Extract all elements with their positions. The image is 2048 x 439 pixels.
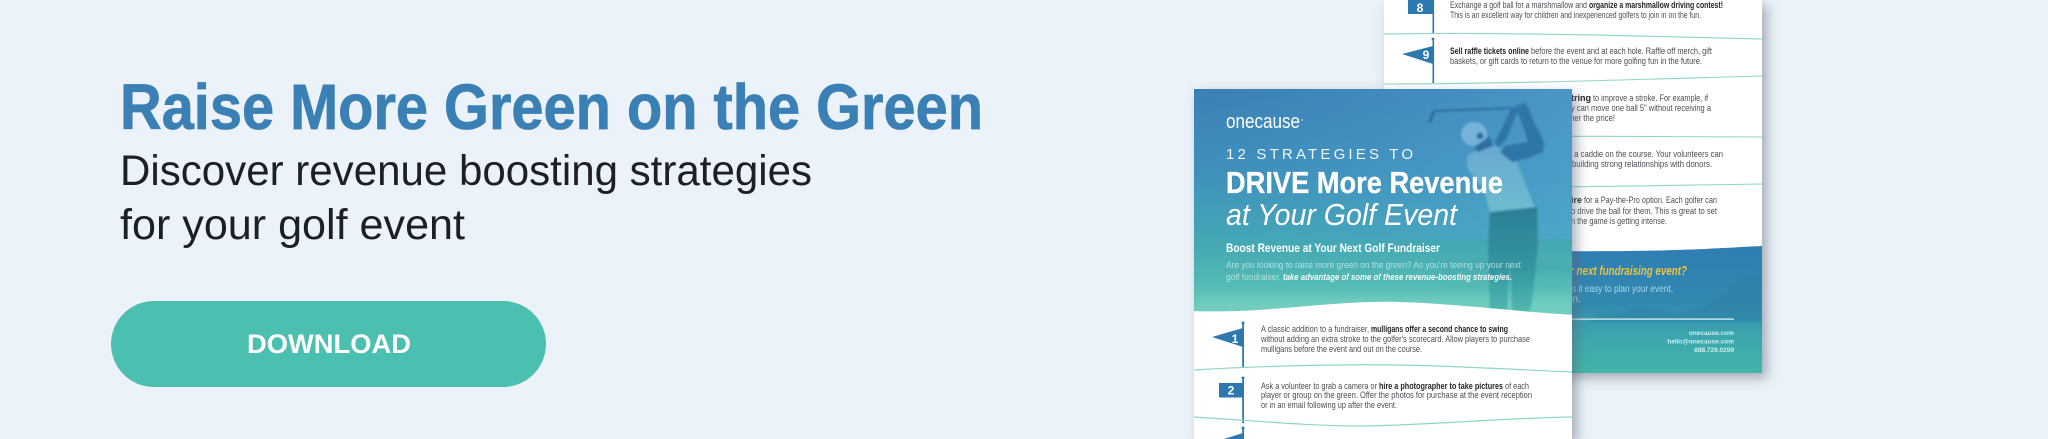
strategy 10 text: string [1566,93,1591,103]
download button: DOWNLOAD [247,329,411,359]
icon: flag 3 [1224,426,1244,439]
strategy 1: A classic addition to a fundraiser, [1261,324,1369,334]
strategy 2: player or group on the green. Offer the photos for purchase at the event reception [1261,390,1532,400]
flyer intro [1226,243,1521,283]
strategy 1: mulligans before the event and out on the course. [1261,344,1422,354]
strategy 12 text: n the game is getting intense. [1571,216,1667,226]
footer body [1572,284,1673,305]
flyer heading: 12 STRATEGIES TO [1226,146,1413,163]
strategy 8: organize a marshmallow driving contest! [1589,0,1723,10]
front page of flyer [1190,89,1576,439]
strategy 1: 1 [1232,332,1239,346]
footer contact: hello@onecause.com [1667,338,1734,346]
strategy 8 [1408,0,1723,33]
subtitle [120,147,812,249]
title: Raise More Green on the Green [120,71,983,143]
strategy 1: mulligans offer a second chance to swing [1371,324,1508,334]
footer contact: onecause.com [1689,330,1734,337]
strategy 2: Ask a volunteer to grab a camera or [1261,381,1377,391]
strategy 9: before the event and at each hole. Raffle off merch, gift [1531,46,1712,56]
logo: onecause [1226,111,1300,133]
strategy 2 [1219,376,1532,423]
footer contact: 888.729.0299 [1694,347,1734,354]
strategy 2: of each [1505,381,1529,391]
back page of flyer [1190,0,1762,439]
horizon haze [1198,298,1568,306]
strategy 1: without adding an extra stroke to the golfer's scorecard. Allow players to purchase [1260,334,1530,344]
white page body wave [1194,302,1572,319]
subtitle: Discover revenue boosting strategies [120,147,812,195]
flyer intro: Boost Revenue at Your Next Golf Fundraiser [1226,243,1440,255]
back page sheet [1384,0,1762,373]
footer tree line [1592,309,1762,322]
strategy 12 text: o drive the ball for them. This is great to set [1571,206,1717,216]
strategy 2: 2 [1228,384,1235,398]
strategy 2: hire a photographer to take pictures [1379,381,1503,391]
strategy 9 [1402,38,1712,83]
footer question: r next fundraising event? [1570,263,1687,278]
strategy 8: 8 [1417,1,1424,15]
strategy 10 text: y can move one ball 5" without receiving a [1571,103,1711,113]
flyer heading [1226,146,1503,232]
flyer heading: at Your Golf Event [1226,197,1458,232]
flyer intro: Are you looking to raise more green on the green? As you're teeing up your next [1226,260,1521,271]
strategy 9: Sell raffle tickets online [1450,46,1529,56]
strategy 8: Exchange a golf ball for a marshmallow and [1450,0,1587,10]
footer body: n. [1572,294,1581,305]
footer body: s it easy to plan your event, [1572,284,1673,295]
strategy 9: baskets, or gift cards to return to the venue for more golfing fun in the future. [1450,56,1702,66]
strategy 11 text: building strong relationships with donors. [1572,159,1712,169]
front page hero [1194,89,1572,315]
footer contact [1667,330,1734,354]
strategy 9: 9 [1423,48,1430,62]
strategy 11 text: t a caddie on the course. Your volunteers can [1570,149,1723,159]
strategy 10 text: her the price! [1570,113,1615,123]
strategy 2: or in an email following up after the event. [1261,400,1397,410]
subtitle: for your golf event [120,201,465,249]
strategy 10 text: to improve a stroke. For example, if [1593,93,1708,103]
strategy 12 text: for a Pay-the-Pro option. Each golfer can [1584,195,1717,205]
front page sheet [1194,89,1572,439]
strategy 11 text [1570,149,1723,169]
strategy 10 text [1566,93,1711,123]
strategy 1 [1212,322,1530,367]
strategy 12 text: ire [1571,195,1582,205]
back page footer [1572,246,1762,373]
strategy 12 text [1571,195,1717,226]
flyer heading: DRIVE More Revenue [1226,165,1503,200]
strategy 8: This is an excellent way for children and inexperienced golfers to join in on the fun. [1450,10,1701,20]
flyer intro: take advantage of some of these revenue-boosting strategies. [1283,272,1512,283]
icon: golfer silhouette [1428,103,1544,312]
download button [111,301,546,387]
flyer intro: golf fundraiser, [1226,272,1281,283]
